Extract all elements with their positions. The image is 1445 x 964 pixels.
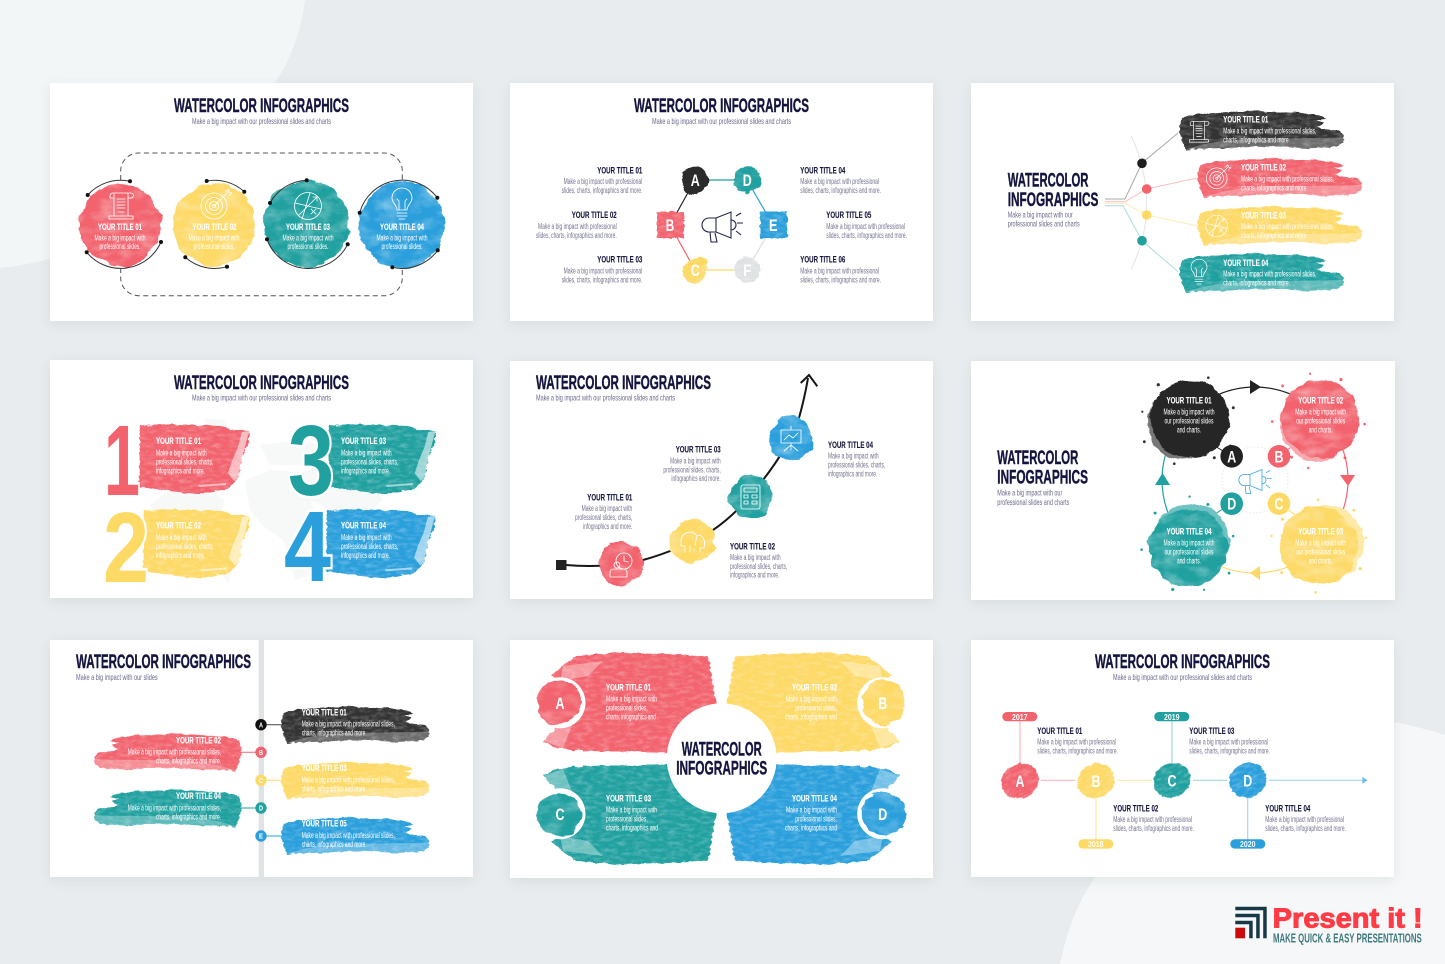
branch D: YOUR TITLE 04 <box>176 791 221 802</box>
circle 03 <box>264 178 350 268</box>
brush 04: Make a big impact with professional slides, <box>1223 270 1316 279</box>
pill 2018: 2018 <box>1088 839 1104 849</box>
node C <box>682 256 709 283</box>
heading <box>997 447 1088 507</box>
item 02: Make a big impact with professional <box>1113 815 1192 824</box>
quadrant D: professional slides, <box>795 815 837 824</box>
heading: Make a big impact with our slides <box>76 672 158 682</box>
splash 03 <box>1261 487 1379 603</box>
quadrant B: YOUR TITLE 02 <box>792 683 837 694</box>
item 01: Make a big impact with professional <box>564 177 642 186</box>
panel: branching brushes <box>971 83 1394 321</box>
panel: four watercolor circles <box>50 83 473 321</box>
quadrant C: professional slides, <box>606 815 648 824</box>
step 2 <box>671 519 715 563</box>
splash 04: YOUR TITLE 04 <box>1166 527 1212 538</box>
node B: B <box>1092 772 1100 791</box>
quadrant A: professional slides, <box>606 704 648 713</box>
brush 02: charts, infographics and more. <box>1241 183 1308 192</box>
brush 01: Make a big impact with professional slides, <box>1223 127 1316 136</box>
world map backdrop <box>150 418 383 585</box>
splash 01: and charts. <box>1177 425 1201 434</box>
badge C: C <box>1274 495 1284 514</box>
circle 02 <box>173 179 255 269</box>
splash 02 <box>1260 361 1375 479</box>
item 4: Make a big impact with <box>341 533 392 542</box>
item 03: YOUR TITLE 03 <box>676 445 721 456</box>
circle 04: YOUR TITLE 04 <box>380 222 424 233</box>
node D <box>1223 757 1272 804</box>
branch B: charts, infographics and more. <box>156 757 221 766</box>
splash 02: our professional slides <box>1296 416 1345 425</box>
node A: A <box>1016 772 1024 791</box>
brush 02 <box>1197 158 1362 197</box>
branch A <box>255 706 429 743</box>
item 03: YOUR TITLE 03 <box>597 255 642 266</box>
node A <box>682 166 709 194</box>
arrow curve <box>556 375 817 570</box>
item 04: YOUR TITLE 04 <box>828 440 873 451</box>
quadrant D <box>727 764 908 865</box>
node D: D <box>1243 772 1252 790</box>
item 2: Make a big impact with <box>156 533 207 542</box>
heading: Make a big impact with our professional slides and charts <box>192 116 331 126</box>
panel: splash cycle <box>971 361 1395 608</box>
branch E: YOUR TITLE 05 <box>302 819 347 830</box>
brush 03: YOUR TITLE 03 <box>1241 210 1286 221</box>
item 4: infographics and more. <box>341 551 390 560</box>
item 03: slides, charts, infographics and more. <box>1189 747 1270 756</box>
item 02: slides, charts, infographics and more. <box>1113 824 1194 833</box>
splash 02: YOUR TITLE 02 <box>1298 395 1343 406</box>
quadrant D: YOUR TITLE 04 <box>792 794 837 805</box>
quadrant A: YOUR TITLE 01 <box>606 683 651 694</box>
heading: WATERCOLOR <box>1008 170 1088 192</box>
quadrant A: Make a big impact with <box>606 695 657 704</box>
item 03: Make a big impact with professional <box>1189 738 1268 747</box>
branch C: C <box>259 776 263 785</box>
heading: Make a big impact with our professional slides and charts <box>652 116 791 126</box>
circle 02: professional slides. <box>194 242 234 251</box>
heading: Make a big impact with our <box>997 488 1062 498</box>
item 04: Make a big impact with <box>828 452 879 460</box>
item 06 <box>800 255 881 284</box>
item 02: infographics and more. <box>730 570 779 580</box>
item 01: slides, charts, infographics and more. <box>1037 747 1118 756</box>
brush 04 <box>1179 253 1344 292</box>
item 4: 4 <box>284 491 331 603</box>
item 2: YOUR TITLE 02 <box>156 521 201 532</box>
nodes <box>1137 158 1151 246</box>
timeline connectors <box>1020 716 1366 844</box>
badge B: B <box>1274 447 1284 466</box>
dashed loop <box>121 153 402 296</box>
quadrant B: B <box>878 694 887 713</box>
badge C <box>1268 492 1290 515</box>
item 02: Make a big impact with <box>730 553 781 562</box>
quadrant A: A <box>556 694 564 713</box>
item 05: Make a big impact with professional <box>826 222 905 231</box>
heading <box>634 95 809 126</box>
splash 02: and charts. <box>1309 425 1333 434</box>
branch D: D <box>259 804 263 813</box>
branch C: Make a big impact with professional slides, <box>302 775 395 784</box>
pill 2019 <box>1154 712 1189 722</box>
branch B: YOUR TITLE 02 <box>176 735 221 746</box>
branch D <box>94 789 267 827</box>
heading: Make a big impact with our professional slides and charts <box>192 392 331 402</box>
branch A: Make a big impact with professional slides, <box>302 720 395 729</box>
brush 03: Make a big impact with professional slides, <box>1241 222 1334 231</box>
item 2 <box>103 492 250 604</box>
item 04: YOUR TITLE 04 <box>800 165 846 176</box>
item 04: slides, charts, infographics and more. <box>800 186 881 195</box>
item 05 <box>826 210 907 240</box>
item 04: YOUR TITLE 04 <box>1265 803 1311 814</box>
step 1 <box>600 542 644 586</box>
item 02: YOUR TITLE 02 <box>1113 803 1158 814</box>
panel: growth curve <box>510 361 933 599</box>
item 04 <box>828 440 885 478</box>
quadrant C <box>534 764 716 865</box>
quadrant D: charts, infographics and <box>785 824 837 833</box>
logo: Present it <box>1235 902 1423 946</box>
node F: F <box>743 261 751 280</box>
heading <box>174 372 349 402</box>
circle 04 <box>358 180 445 269</box>
item 4 <box>284 491 436 603</box>
node A <box>996 758 1044 804</box>
item 01: infographics and more. <box>583 522 632 531</box>
heading: Make a big impact with our professional slides and charts <box>1113 672 1252 682</box>
center title: INFOGRAPHICS <box>676 757 767 779</box>
item 04: Make a big impact with professional <box>1265 815 1344 824</box>
brush 01 <box>1179 110 1344 150</box>
item 1: infographics and more. <box>156 466 205 475</box>
splash 03: and charts. <box>1309 557 1333 566</box>
item 01 <box>575 492 633 531</box>
branch B: Make a big impact with professional slides, <box>128 748 221 757</box>
item 3: YOUR TITLE 03 <box>341 436 386 447</box>
panel: numbered brushes <box>50 360 473 604</box>
item 03: YOUR TITLE 03 <box>1189 726 1234 737</box>
item 02: YOUR TITLE 02 <box>730 541 775 552</box>
heading: professional slides and charts <box>997 497 1069 507</box>
splash 01 <box>1141 376 1235 465</box>
branch D: Make a big impact with professional slides, <box>128 803 221 812</box>
heading: Make a big impact with our <box>1008 210 1073 220</box>
node C: C <box>1168 772 1176 790</box>
item 03 <box>1189 726 1270 756</box>
branch E: charts, infographics and more. <box>302 840 367 849</box>
branch E: Make a big impact with professional slides, <box>302 831 395 840</box>
item 01 <box>1037 726 1118 756</box>
item 1: YOUR TITLE 01 <box>156 436 201 447</box>
item 03: slides, charts, infographics and more. <box>562 275 642 284</box>
item 1 <box>104 405 250 517</box>
node A: A <box>691 171 700 190</box>
brush 04: YOUR TITLE 04 <box>1223 258 1269 269</box>
quadrant D: Make a big impact with <box>786 806 837 815</box>
badge D: D <box>1227 495 1236 514</box>
heading: professional slides and charts <box>1008 218 1080 228</box>
splash 01: our professional slides <box>1164 416 1214 425</box>
circle 01: professional slides. <box>100 242 140 251</box>
brand name: Present it ! <box>1273 902 1423 933</box>
branch A: charts, infographics and more. <box>302 729 367 738</box>
item 02 <box>536 210 617 240</box>
branch B <box>94 733 267 771</box>
item 03 <box>663 445 721 483</box>
branch E <box>255 817 429 854</box>
item 06: slides, charts, infographics and more. <box>800 275 881 284</box>
pill 2017 <box>1002 712 1037 722</box>
item 01: YOUR TITLE 01 <box>597 165 643 176</box>
center title <box>510 640 933 878</box>
node B <box>657 212 684 238</box>
item 05: slides, charts, infographics and more. <box>826 231 907 240</box>
pill 2020 <box>1230 839 1265 849</box>
splash 04: and charts. <box>1177 557 1201 566</box>
item 04 <box>1265 803 1346 833</box>
item 06: YOUR TITLE 06 <box>800 255 845 266</box>
quadrant A <box>534 652 716 753</box>
brush 03: charts, infographics and more. <box>1241 231 1308 240</box>
circle 03: YOUR TITLE 03 <box>286 222 330 233</box>
node E <box>760 212 787 238</box>
heading: WATERCOLOR INFOGRAPHICS <box>174 95 349 117</box>
badge A <box>1220 445 1243 468</box>
item 1: 1 <box>104 405 140 517</box>
panel: hexagon <box>510 83 933 321</box>
item 3: professional slides, charts, <box>341 457 398 466</box>
circle 03: Make a big impact with <box>282 234 334 242</box>
branch E: E <box>259 832 263 841</box>
item 04: infographics and more. <box>828 469 877 478</box>
branch C: charts, infographics and more. <box>302 784 367 793</box>
brush 03 <box>1197 206 1362 245</box>
circle 03: professional slides. <box>288 242 328 251</box>
brush 02: YOUR TITLE 02 <box>1241 163 1286 174</box>
node E: E <box>769 216 778 235</box>
badge D <box>1220 492 1243 515</box>
branch C: YOUR TITLE 03 <box>302 763 347 774</box>
node C: C <box>691 261 700 280</box>
item 04: Make a big impact with professional <box>800 177 879 186</box>
branch D: charts, infographics and more. <box>156 812 221 821</box>
heading <box>536 372 711 402</box>
circle 01: Make a big impact with <box>94 234 146 242</box>
panel: vertical timeline brushes <box>50 640 473 877</box>
heading: WATERCOLOR INFOGRAPHICS <box>76 651 251 673</box>
item 3: 3 <box>288 405 334 517</box>
dotted ring and inner links <box>1205 440 1300 520</box>
splash 03: our professional slides <box>1296 548 1345 557</box>
pill 2019: 2019 <box>1164 712 1180 722</box>
branch B: B <box>259 748 263 757</box>
pill 2020: 2020 <box>1240 839 1256 849</box>
item 02 <box>730 541 787 580</box>
item 02: slides, charts, infographics and more. <box>536 231 617 240</box>
quadrant B: Make a big impact with <box>786 695 837 704</box>
branch C <box>255 762 429 799</box>
item 4: professional slides, charts, <box>341 542 398 551</box>
item 1: Make a big impact with <box>156 448 207 457</box>
heading: WATERCOLOR INFOGRAPHICS <box>536 372 711 394</box>
branch A: YOUR TITLE 01 <box>302 707 347 718</box>
node B: B <box>666 216 674 235</box>
quadrant A: charts, infographics and . <box>606 713 658 722</box>
brush 01: YOUR TITLE 01 <box>1223 115 1269 126</box>
arrowheads <box>1155 380 1355 580</box>
quadrant B <box>727 652 908 753</box>
circle 02: Make a big impact with <box>188 234 240 242</box>
node C <box>1148 757 1196 804</box>
heading: WATERCOLOR INFOGRAPHICS <box>1095 651 1270 673</box>
heading: WATERCOLOR <box>997 447 1078 469</box>
item 02: YOUR TITLE 02 <box>572 210 617 221</box>
panel: horizontal timeline <box>971 640 1394 877</box>
splash 02: Make a big impact with <box>1295 407 1346 416</box>
center title: WATERCOLOR <box>682 738 762 760</box>
item 05: YOUR TITLE 05 <box>826 210 872 221</box>
splash 01: Make a big impact with <box>1164 407 1214 416</box>
item 01: YOUR TITLE 01 <box>1037 726 1083 737</box>
brush 04: charts, infographics and more. <box>1223 279 1290 288</box>
item 02: professional slides, charts, <box>730 562 787 571</box>
item 04 <box>800 165 881 195</box>
item 04: slides, charts, infographics and more. <box>1265 824 1346 833</box>
heading: Make a big impact with our professional slides and charts <box>536 392 675 402</box>
item 01: Make a big impact with <box>582 504 632 513</box>
circle 04: Make a big impact with <box>376 234 428 242</box>
quadrant B: professional slides, <box>795 704 837 713</box>
node D: D <box>743 171 752 190</box>
item 3 <box>288 405 436 517</box>
quadrant D: D <box>878 805 887 824</box>
item 03: professional slides, charts, <box>663 465 721 474</box>
item 03: infographics and more. <box>671 474 721 483</box>
heading <box>76 651 251 682</box>
item 01 <box>562 165 643 195</box>
item 01: YOUR TITLE 01 <box>587 492 633 503</box>
hexagon links <box>670 180 773 270</box>
item 2: infographics and more. <box>156 551 205 560</box>
heading: WATERCOLOR INFOGRAPHICS <box>174 372 349 394</box>
item 01: professional slides, charts, <box>575 513 632 522</box>
item 02: Make a big impact with professional <box>538 222 617 231</box>
vertical spine <box>259 640 264 877</box>
brush 01: charts, infographics and more. <box>1223 136 1290 145</box>
heading <box>174 95 349 126</box>
quadrant B: charts, infographics and <box>785 713 837 722</box>
splash 01: YOUR TITLE 01 <box>1166 395 1212 406</box>
item 02 <box>1113 803 1194 833</box>
heading: WATERCOLOR INFOGRAPHICS <box>634 95 809 117</box>
heading: INFOGRAPHICS <box>1008 189 1098 211</box>
quadrant C: Make a big impact with <box>606 806 657 815</box>
step 3 <box>729 475 773 519</box>
brush 02: Make a big impact with professional slides, <box>1241 174 1334 183</box>
heading: INFOGRAPHICS <box>997 467 1088 489</box>
icon: blue megaphone <box>1239 470 1272 494</box>
item 01: Make a big impact with professional <box>1037 738 1116 747</box>
circle 01: YOUR TITLE 01 <box>98 222 142 233</box>
item 4: YOUR TITLE 04 <box>341 521 386 532</box>
badge A: A <box>1227 447 1236 466</box>
item 3: Make a big impact with <box>341 448 392 457</box>
cycle arcs <box>1162 387 1348 573</box>
node F <box>734 257 760 283</box>
step 4 <box>769 417 813 461</box>
splash 04 <box>1127 483 1251 608</box>
quadrant C: charts, infographics and <box>606 824 658 833</box>
item 1: professional slides, charts, <box>156 457 213 466</box>
circle 04: professional slides. <box>382 242 422 251</box>
quadrant C: YOUR TITLE 03 <box>606 794 651 805</box>
branch A: A <box>259 720 263 730</box>
item 2: 2 <box>103 492 149 604</box>
heading <box>1095 651 1270 682</box>
item 04: professional slides, charts, <box>828 460 885 470</box>
quadrant C: C <box>556 805 564 824</box>
logo mark <box>1235 907 1267 938</box>
icon: megaphone <box>702 212 743 242</box>
splash 04: our professional slides <box>1164 548 1214 557</box>
branch lines <box>1105 133 1197 272</box>
node B <box>1072 758 1120 804</box>
circle 02: YOUR TITLE 02 <box>192 222 236 233</box>
splash 03: Make a big impact with <box>1295 539 1346 548</box>
badge B <box>1268 445 1290 468</box>
item 03: Make a big impact with <box>670 456 721 465</box>
pill 2017: 2017 <box>1012 712 1028 722</box>
item 2: professional slides, charts, <box>156 542 213 551</box>
item 01: slides, charts, infographics and more. <box>562 186 642 195</box>
item 03 <box>562 255 642 284</box>
item 03: Make a big impact with professional <box>564 266 642 275</box>
item 06: Make a big impact with professional <box>800 266 879 275</box>
splash 04: Make a big impact with <box>1164 539 1214 548</box>
heading <box>1008 170 1098 228</box>
circle 01 <box>79 179 163 268</box>
item 3: infographics and more. <box>341 466 390 475</box>
node D <box>734 166 761 193</box>
splash 03: YOUR TITLE 03 <box>1298 527 1343 538</box>
pill 2018 <box>1078 839 1113 849</box>
panel: four quadrants <box>510 640 933 878</box>
